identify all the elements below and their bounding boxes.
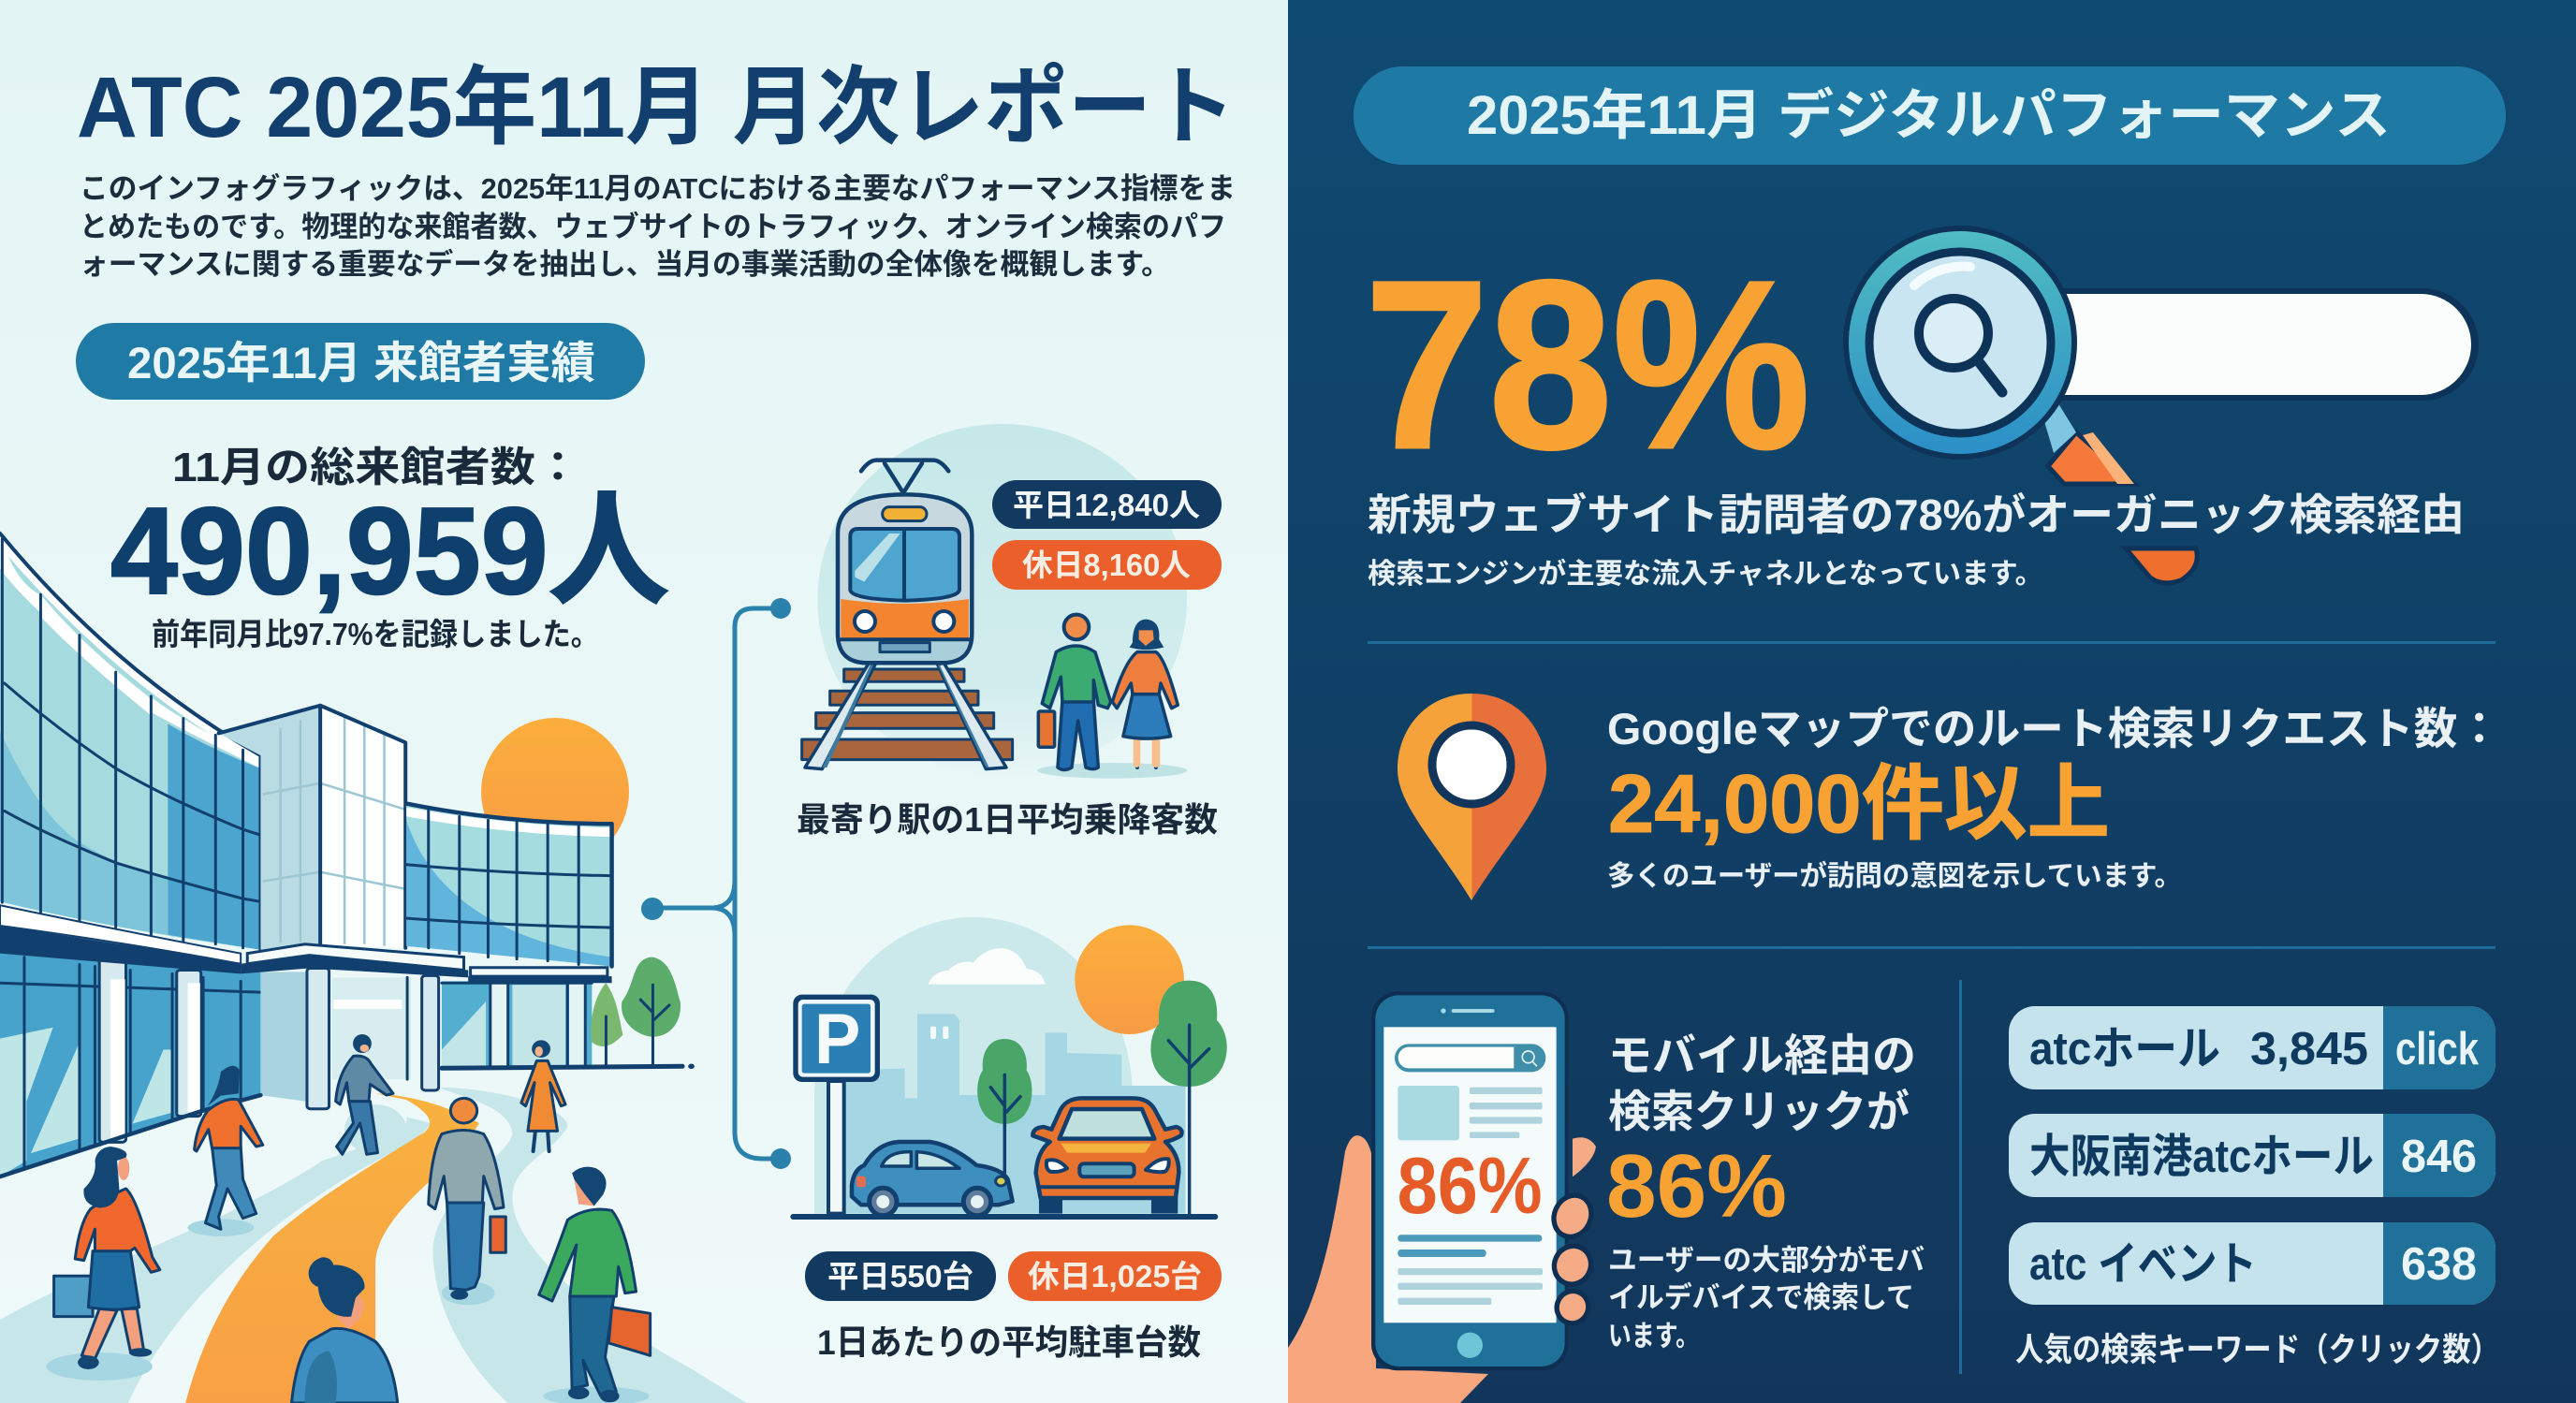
mobile search stat: 検索クリックが [1608, 1087, 1910, 1136]
illustration: walkway [0, 1088, 747, 1403]
organic search text: 検索エンジンが主要な流入チャネルとなっています。 [1368, 558, 2043, 590]
keyword row: atcホール [2009, 1006, 2496, 1089]
cloud [929, 948, 1046, 985]
mobile search stat: 86% [1606, 1136, 1787, 1236]
keyword row: atc イベント [2009, 1222, 2496, 1305]
icon: passengers [1037, 615, 1187, 779]
ground floor [0, 926, 592, 1176]
fingers [1547, 1190, 1598, 1328]
icon: blue car [852, 1142, 1013, 1216]
person: man in green [539, 1167, 651, 1403]
icon: parking sign: P [814, 1000, 860, 1079]
tower [219, 706, 405, 950]
keyword row: 大阪南港atcホール [2009, 1114, 2496, 1197]
maps stat [1607, 704, 2501, 892]
mobile search stat: イルデバイスで検索して [1608, 1281, 1914, 1314]
title: ATC 2025年11月 月次レポート [77, 60, 1236, 155]
total visitors stat: 490,959人 [110, 482, 669, 620]
section heading: visitors [76, 323, 645, 400]
keyword row: atcホール: click [2395, 1024, 2480, 1074]
right wing [406, 804, 612, 967]
weekday parking badge: 平日550台 [827, 1259, 973, 1293]
keyword row: atcホール: atcホール [2029, 1024, 2220, 1074]
phone 86%: 86% [1398, 1142, 1543, 1231]
icon: railway track [802, 663, 1013, 769]
connector lines [641, 598, 791, 1169]
organic search text: 新規ウェブサイト訪問者の78%がオーガニック検索経由 [1368, 490, 2465, 539]
keyword row: 大阪南港atcホール: 大阪南港atcホール [2029, 1132, 2374, 1182]
illustration: parking scene [793, 917, 1227, 1217]
sun [1075, 925, 1184, 1034]
section heading: digital performance [1354, 66, 2506, 165]
icon: orange car [1032, 1098, 1182, 1214]
sun behind building [481, 718, 629, 866]
tree large [1150, 981, 1227, 1214]
section heading: visitors: 2025年11月 来館者実績 [127, 338, 595, 387]
weekday ridership badge [992, 480, 1222, 529]
holiday parking badge: 休日1,025台 [1028, 1259, 1202, 1293]
section heading: digital performance: 2025年11月 デジタルパフォーマンス [1467, 85, 2391, 146]
parking caption: 1日あたりの平均駐車台数 [817, 1323, 1201, 1362]
person: woman in jeans [188, 1066, 263, 1236]
icon: train [838, 460, 972, 663]
person: man entering [336, 1034, 406, 1154]
total visitors stat [110, 445, 669, 651]
intro text block [80, 172, 1236, 281]
phone search bar [1395, 1044, 1545, 1072]
illustration: train and passengers [802, 424, 1187, 779]
holiday ridership badge: 休日8,160人 [1022, 548, 1191, 582]
keyword caption: 人気の検索キーワード（クリック数） [2015, 1332, 2499, 1368]
panel: right background [1288, 0, 2576, 1403]
person: foreground with bun [291, 1257, 398, 1403]
illustration: people walking [47, 1034, 651, 1403]
keyword row: atc イベント: 638 [2401, 1239, 2477, 1290]
mobile search stat: います。 [1608, 1320, 1699, 1352]
maps stat: Googleマップでのルート検索リクエスト数： [1607, 704, 2501, 753]
mobile search stat [1606, 1030, 1925, 1352]
intro text block: ォーマンスに関する重要なデータを抽出し、当月の事業活動の全体像を概観します。 [80, 248, 1170, 281]
person: woman in dress [521, 1040, 565, 1151]
weekday ridership badge: 平日12,840人 [1013, 488, 1200, 522]
total visitors stat: 11月の総来館者数： [172, 445, 580, 490]
icon: hand holding phone [1288, 991, 1598, 1403]
organic search text [1368, 490, 2465, 590]
total visitors stat: 前年同月比97.7%を記録しました。 [152, 617, 599, 651]
canopy [0, 905, 612, 983]
keyword chart [2009, 1006, 2499, 1368]
big stat 78%: 78% [1365, 231, 1810, 499]
keyword row: 大阪南港atcホール: 846 [2401, 1132, 2477, 1182]
maps stat: 多くのユーザーが訪問の意図を示しています。 [1607, 860, 2182, 892]
holiday ridership badge [992, 540, 1222, 590]
icon: search bar with magnifying glass [1843, 226, 2479, 583]
intro text block: とめたものです。物理的な来館者数、ウェブサイトのトラフィック、オンライン検索のパフ [80, 211, 1226, 243]
mobile search stat: ユーザーの大部分がモバ [1608, 1244, 1925, 1277]
station caption: 最寄り駅の1日平均乗降客数 [797, 800, 1218, 839]
holiday parking badge [1008, 1251, 1222, 1301]
icon: map pin [1398, 694, 1546, 900]
weekday parking badge [805, 1251, 996, 1301]
keyword row: atcホール: 3,845 [2250, 1024, 2368, 1074]
illustration: building [0, 533, 695, 1176]
keyword row: atc イベント: atc イベント [2029, 1239, 2257, 1290]
tree small [977, 1039, 1032, 1173]
person: man with orange bag [429, 1098, 505, 1305]
mobile search stat: モバイル経由の [1608, 1030, 1916, 1080]
intro text block: このインフォグラフィックは、2025年11月のATCにおける主要なパフォーマンス指標をま [80, 172, 1236, 205]
panel: left background [0, 0, 1288, 1403]
person: woman with bag [47, 1147, 160, 1381]
maps stat: 24,000件以上 [1608, 757, 2110, 850]
trees [591, 957, 681, 1066]
icon: parking sign [793, 995, 880, 1214]
